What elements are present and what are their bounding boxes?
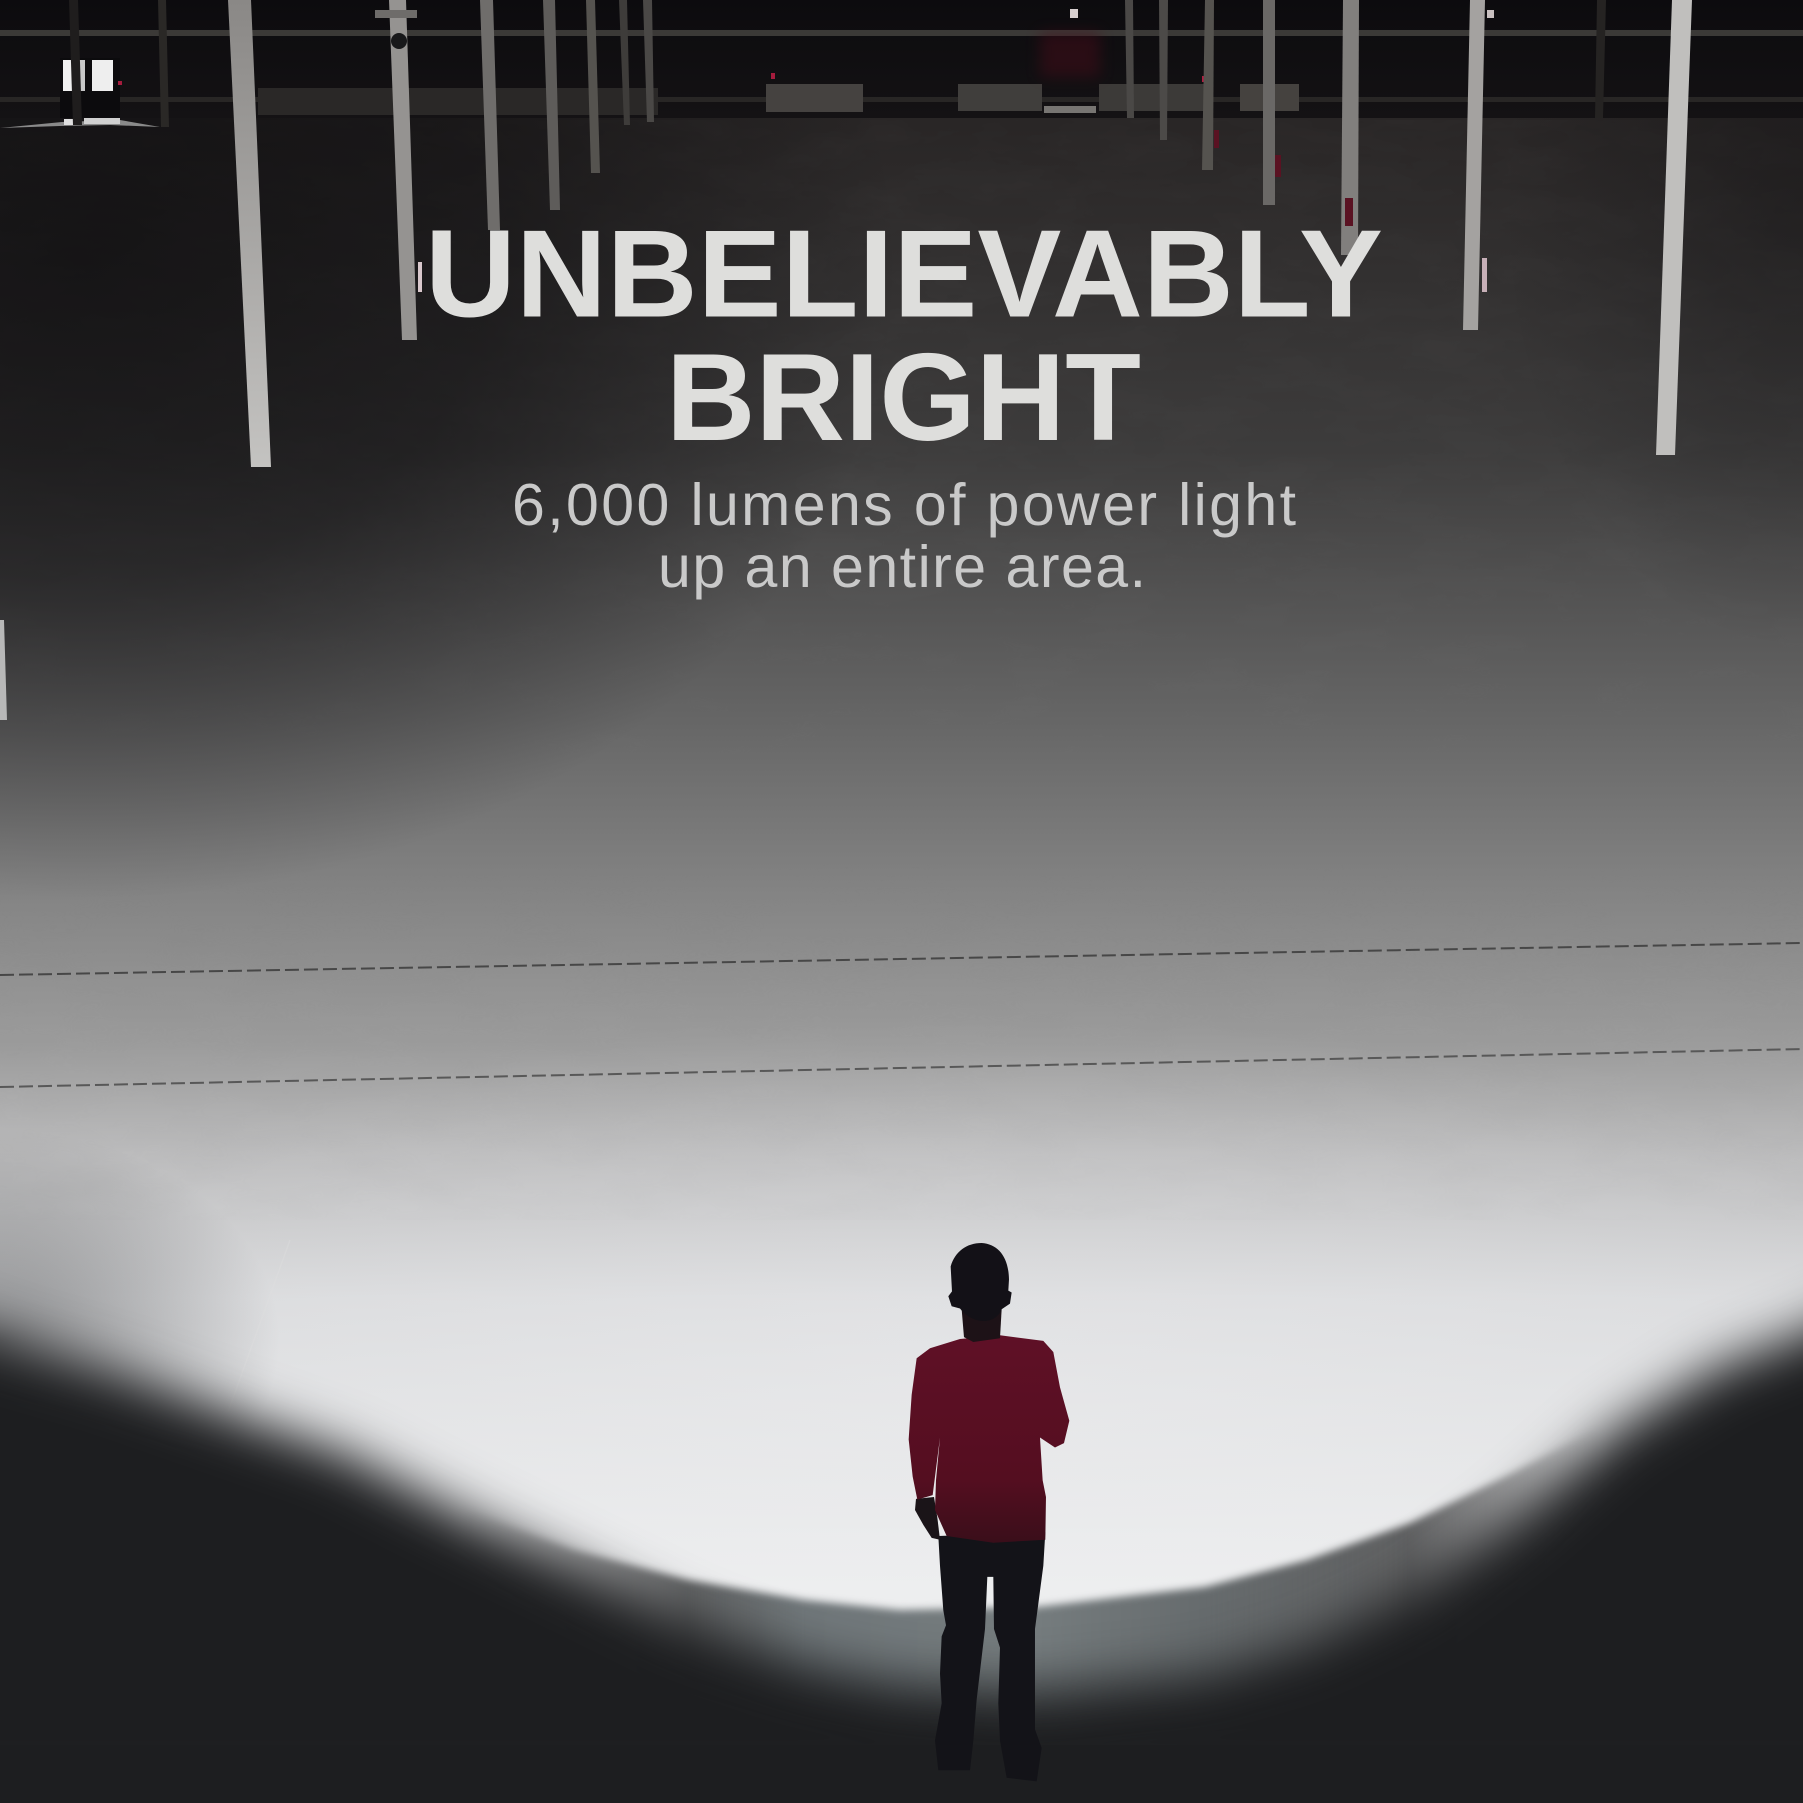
lit doorway <box>0 58 160 128</box>
subtitle line 2: up an entire area. <box>658 534 1146 600</box>
subtitle <box>512 472 1296 600</box>
bottom floor <box>0 1745 1803 1803</box>
columns: right side <box>1125 0 1692 455</box>
edge column fragment <box>0 620 7 720</box>
title line 1: UNBELIEVABLY <box>425 206 1383 344</box>
red shirt <box>909 1335 1069 1543</box>
beam edge: grey falloff crescent under light <box>440 1427 1600 1760</box>
subtitle line 1: 6,000 lumens of power light <box>512 472 1296 538</box>
title <box>425 206 1383 467</box>
trousers <box>935 1532 1045 1781</box>
columns: left side <box>69 0 654 467</box>
hand and wrist <box>915 1497 940 1540</box>
title line 2: BRIGHT <box>666 329 1141 467</box>
person silhouette <box>909 1243 1069 1781</box>
back wall <box>0 0 1803 118</box>
neck <box>962 1309 1002 1342</box>
floor lane lines <box>0 943 1803 1087</box>
head <box>948 1243 1012 1321</box>
beam shadow: dark area below light <box>0 1300 1803 1803</box>
